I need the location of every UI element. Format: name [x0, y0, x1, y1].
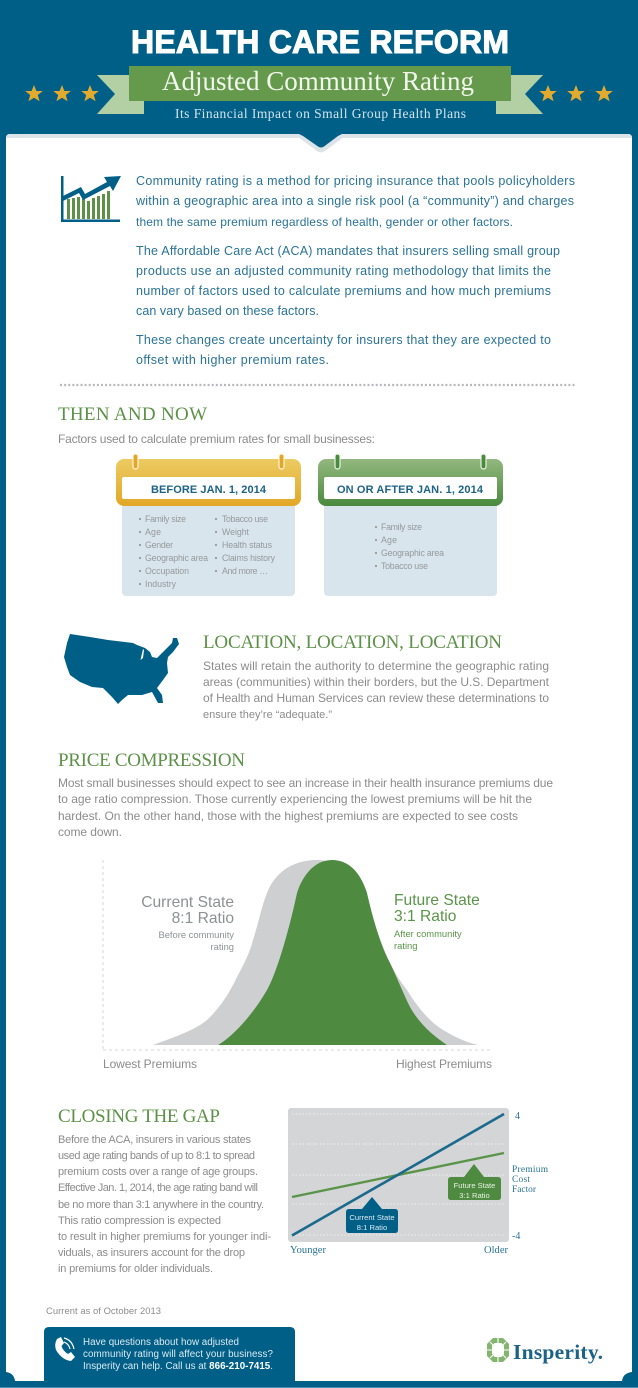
axis labels: Highest Premiums [396, 1057, 492, 1071]
green curve: future state [218, 860, 447, 1045]
current state label: 8:1 Ratio [172, 910, 234, 927]
current state label: Before community [158, 929, 234, 940]
tag: current state: Current State [349, 1213, 395, 1222]
future state label: Future State [394, 892, 480, 909]
contact text: Insperity can help. Call us at 866-210-7415. [83, 1361, 273, 1372]
line: future state [292, 1153, 504, 1197]
price compression text: to age ratio compression. Those currently experiencing the lowest premiums will be hit the [58, 792, 532, 806]
before factor list: Gender [145, 540, 173, 550]
future state label: 3:1 Ratio [394, 908, 457, 925]
price compression text: come down. [58, 825, 122, 839]
intro text: The Affordable Care Act (ACA) mandates that insurers selling small group [136, 244, 560, 258]
callout: contact box [44, 1327, 295, 1381]
icon: phone [55, 1337, 75, 1361]
logo: Insperity: Insperity. [513, 1340, 603, 1364]
icon: rising chart [61, 176, 121, 222]
location text: of Health and Human Services can review these determinations to [203, 691, 549, 705]
intro text: them the same premium regardless of health, gender or other factors. [136, 215, 513, 229]
line: current state [292, 1114, 504, 1236]
intro text: products use an adjusted community rating methodology that limits the [136, 264, 551, 278]
before factor list: Family size [145, 514, 186, 524]
chart axis labels [290, 1111, 549, 1256]
heading: price compression: PRICE COMPRESSION [58, 750, 245, 771]
after factor list: Tobacco use [381, 561, 428, 571]
intro text: These changes create uncertainty for insurers that they are expected to [136, 333, 551, 347]
logo mark [487, 1338, 509, 1362]
price compression text: hardest. On the other hand, those with the highest premiums are expected to see costs [58, 809, 518, 823]
price compression text: Most small businesses should expect to see an increase in their health insurance premiums due [58, 776, 553, 790]
intro text: within a geographic area into a single risk pool (a “community”) and charges [135, 194, 574, 208]
chart axis labels: Younger [290, 1245, 326, 1256]
tag: future state: 3:1 Ratio [459, 1191, 490, 1200]
contact text [83, 1337, 274, 1372]
before label: BEFORE JAN. 1, 2014 [151, 484, 267, 496]
intro text: Community rating is a method for pricing insurance that pools policyholders [136, 174, 575, 188]
then and now subtitle: Factors used to calculate premium rates for small businesses: [58, 432, 375, 446]
icon: United States map [64, 634, 179, 704]
panel: before Jan 1 2014 [116, 454, 301, 596]
axis labels [103, 1057, 492, 1071]
before factor list: Health status [222, 540, 273, 550]
intro text: can vary based on these factors. [136, 304, 319, 318]
current state label [141, 894, 234, 952]
icon: stars left [25, 85, 99, 101]
future state label [394, 892, 480, 951]
chart axis labels: -4 [512, 1231, 520, 1242]
intro text: offset with higher premium rates. [136, 353, 329, 367]
panel: on or after Jan 1 2014 [318, 454, 503, 596]
closing the gap text [58, 1134, 271, 1275]
title: HEALTH CARE REFORM [131, 24, 509, 60]
closing the gap text: Before the ACA, insurers in various states [58, 1134, 252, 1146]
location text: ensure they’re “adequate.” [203, 709, 332, 721]
future state label: rating [394, 940, 417, 951]
closing the gap text: viduals, as insurers account for the drop [58, 1247, 245, 1259]
closing the gap text: in premiums for older individuals. [58, 1263, 213, 1275]
date note: Current as of October 2013 [46, 1305, 161, 1316]
chart axis labels: Premium [512, 1165, 549, 1175]
tag: future state: Future State [454, 1181, 495, 1190]
before factor list: Age [145, 527, 161, 537]
closing the gap text: premium costs over a range of age groups. [58, 1166, 258, 1178]
closing the gap text: used age rating bands of up to 8:1 to spread [58, 1150, 255, 1162]
location text: States will retain the authority to determine the geographic rating [203, 659, 549, 673]
before factor list: Occupation [145, 566, 189, 576]
before factor list: Claims history [222, 553, 276, 563]
chart axis labels: Older [484, 1245, 508, 1256]
tag: current state: 8:1 Ratio [357, 1223, 387, 1232]
location text [203, 659, 550, 721]
subtitle: Its Financial Impact on Small Group Health Plans [175, 106, 466, 121]
icon: stars right [539, 85, 613, 101]
tag: current state [346, 1197, 398, 1233]
heading: location: LOCATION, LOCATION, LOCATION [203, 632, 502, 653]
before factor list: And more … [222, 566, 268, 576]
closing the gap text: This ratio compression is expected [58, 1215, 221, 1227]
before factor list: Tobacco use [222, 514, 268, 524]
chart axis labels: Cost [512, 1175, 530, 1185]
price compression text [58, 776, 553, 839]
after factor list [375, 522, 444, 571]
after factor list: Geographic area [381, 548, 444, 558]
before factor list: Industry [145, 579, 177, 589]
gray curve: current state [153, 860, 478, 1045]
bell curve chart [103, 860, 492, 1071]
closing the gap text: be no more than 3:1 anywhere in the country. [58, 1199, 264, 1211]
current state label: Current State [141, 894, 234, 911]
closing the gap text: to result in higher premiums for younger indi- [58, 1231, 271, 1243]
chart axis labels: 4 [515, 1111, 520, 1122]
before factor list: Geographic area [145, 553, 208, 563]
chart axis labels: Factor [512, 1185, 537, 1195]
closing the gap text: Effective Jan. 1, 2014, the age rating band will [58, 1182, 258, 1194]
heading: then and now: THEN AND NOW [58, 404, 207, 425]
line chart [288, 1108, 549, 1256]
after factor list: Age [381, 535, 397, 545]
contact text: community rating will affect your business? [83, 1349, 274, 1360]
after label: ON OR AFTER JAN. 1, 2014 [337, 484, 484, 496]
intro text [135, 174, 575, 367]
before factor list: Weight [222, 527, 250, 537]
contact text: Have questions about how adjusted [83, 1337, 239, 1348]
location text: areas (communities) within their borders, but the U.S. Department [203, 675, 550, 689]
intro text: number of factors used to calculate premiums and how much premiums [136, 284, 551, 298]
axis labels: Lowest Premiums [103, 1057, 197, 1071]
current state label: rating [211, 941, 234, 952]
tag: future state [448, 1164, 501, 1200]
after factor list: Family size [381, 522, 422, 532]
heading: closing the gap: CLOSING THE GAP [58, 1106, 220, 1127]
future state label: After community [394, 928, 462, 939]
ribbon banner [97, 66, 543, 114]
before factor list [139, 514, 276, 589]
ribbon text: Adjusted Community Rating [162, 66, 474, 96]
